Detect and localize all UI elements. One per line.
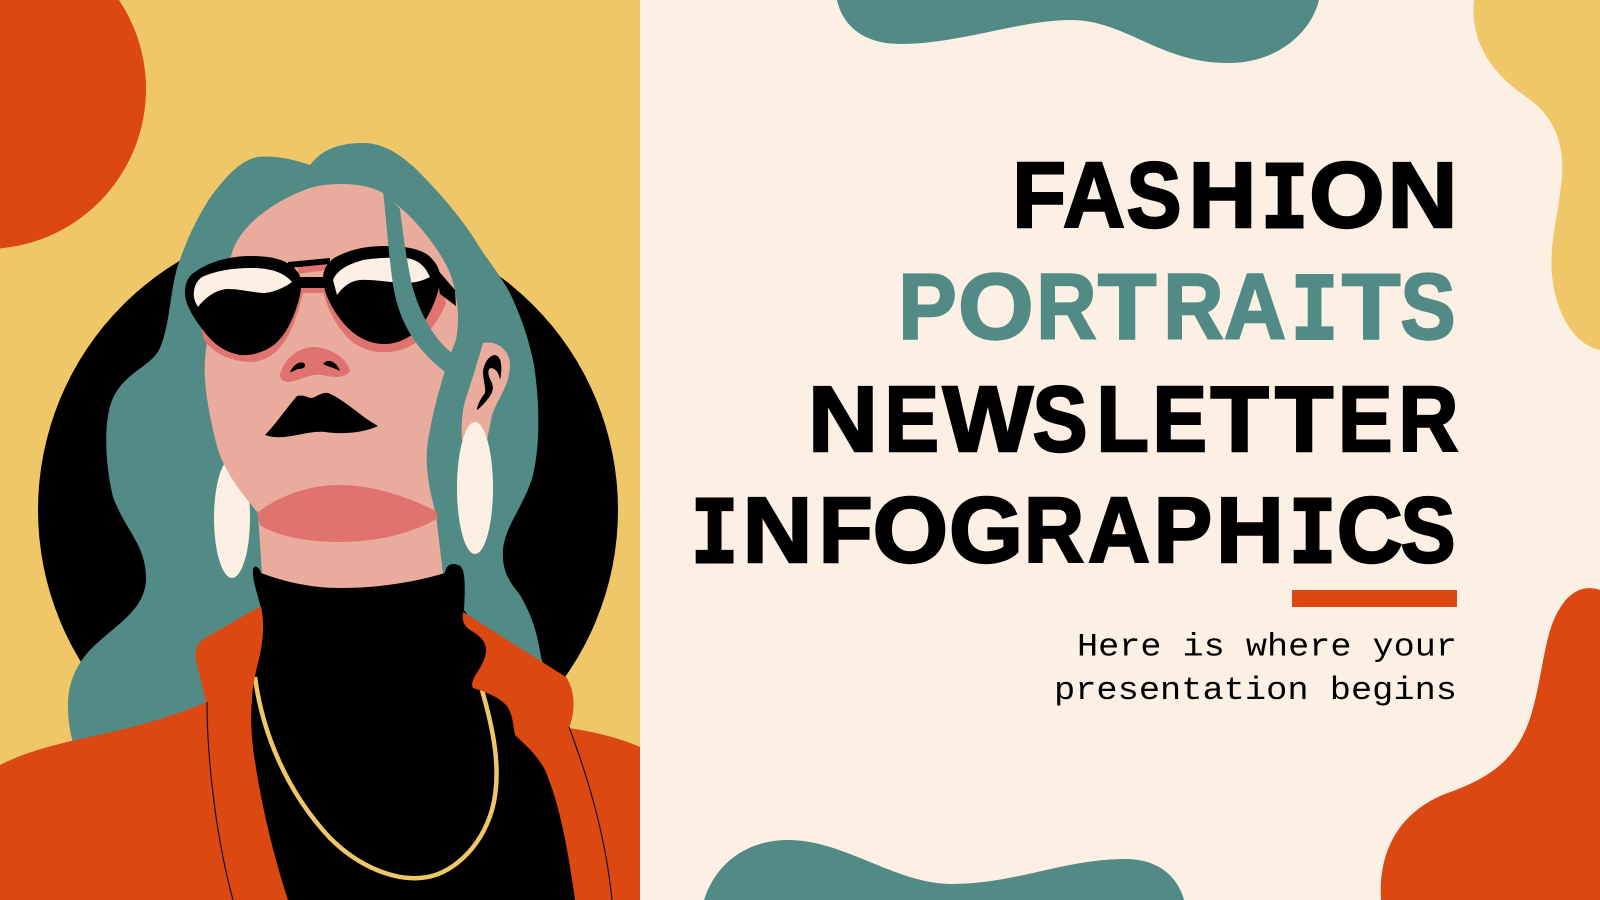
black circle xyxy=(38,220,618,800)
title line: PORTRAITS: O xyxy=(958,254,1034,358)
coat seam right xyxy=(569,727,612,900)
blob: bottom right orange xyxy=(1381,588,1600,900)
title line: NEWSLETTER: N xyxy=(808,367,878,471)
bridge xyxy=(288,258,330,288)
bridge skin pink strip xyxy=(298,264,326,293)
right lens glare xyxy=(333,258,430,295)
blob: bottom teal xyxy=(704,840,1184,900)
right lens xyxy=(323,246,440,344)
title line: PORTRAITS: I xyxy=(1291,258,1338,367)
right glasses rim xyxy=(322,280,446,352)
temple xyxy=(436,268,456,306)
coat left xyxy=(0,606,288,900)
title line: INFOGRAPHICS: C xyxy=(1337,478,1403,582)
title line: NEWSLETTER: S xyxy=(1032,367,1088,471)
title line: NEWSLETTER: W xyxy=(943,367,1033,471)
left earring xyxy=(214,458,250,578)
orange circle xyxy=(0,0,146,249)
title xyxy=(691,143,1458,591)
title line: NEWSLETTER: R xyxy=(1398,367,1458,471)
coat right xyxy=(463,612,640,900)
title line: FASHION: I xyxy=(1261,147,1308,256)
title line: INFOGRAPHICS: O xyxy=(873,478,948,582)
blob: top right yellow xyxy=(1473,0,1600,350)
title line: INFOGRAPHICS: P xyxy=(1154,478,1212,582)
nose xyxy=(280,347,350,382)
ear detail xyxy=(477,355,501,410)
title line: PORTRAITS: S xyxy=(1400,254,1456,358)
title line: PORTRAITS: T xyxy=(1342,254,1400,358)
right earring xyxy=(457,422,493,554)
title line: INFOGRAPHICS: I xyxy=(1289,482,1336,591)
lips xyxy=(265,393,378,437)
turtleneck and body xyxy=(230,564,600,900)
title line: INFOGRAPHICS: G xyxy=(949,478,1023,582)
title line: INFOGRAPHICS: F xyxy=(819,478,873,582)
title line: NEWSLETTER: E xyxy=(1152,367,1207,471)
title line: FASHION: F xyxy=(1012,143,1066,247)
title line: INFOGRAPHICS: R xyxy=(1024,478,1084,582)
accent bar xyxy=(1292,590,1457,607)
title line: FASHION: N xyxy=(1388,143,1458,247)
title line: INFOGRAPHICS: H xyxy=(1216,478,1284,582)
title line: INFOGRAPHICS: A xyxy=(1088,478,1150,582)
title line: NEWSLETTER: E xyxy=(1338,367,1392,471)
left glasses rim xyxy=(200,285,304,362)
title line: FASHION: S xyxy=(1126,143,1182,247)
subtitle xyxy=(1054,628,1457,709)
title line: FASHION: H xyxy=(1188,143,1256,247)
panel: portrait illustration xyxy=(0,0,640,900)
right nostril xyxy=(323,361,340,371)
title line: PORTRAITS: R xyxy=(1036,254,1096,358)
title line: FASHION: O xyxy=(1309,143,1385,247)
title line: PORTRAITS: A xyxy=(1224,254,1286,358)
title line: NEWSLETTER: L xyxy=(1096,367,1149,471)
title line: NEWSLETTER: T xyxy=(1275,367,1333,471)
face and neck xyxy=(205,184,458,590)
title line: PORTRAITS: T xyxy=(1098,254,1156,358)
subtitle line 2: presentation begins xyxy=(1054,672,1457,709)
title line: FASHION: A xyxy=(1063,143,1125,247)
title line: INFOGRAPHICS: N xyxy=(742,478,812,582)
left lens xyxy=(185,256,301,355)
title line: INFOGRAPHICS: I xyxy=(691,482,738,591)
neck shadow xyxy=(257,485,438,542)
coat seam left xyxy=(207,702,233,900)
title line: NEWSLETTER: E xyxy=(884,367,939,471)
title line: NEWSLETTER: T xyxy=(1210,367,1269,471)
subtitle line 1: Here is where your xyxy=(1077,628,1457,666)
title line: INFOGRAPHICS: S xyxy=(1400,478,1456,582)
title line: PORTRAITS: R xyxy=(1163,254,1224,358)
front hair strand xyxy=(383,191,452,372)
left lens glare xyxy=(194,268,292,307)
blob: top teal xyxy=(837,0,1319,63)
necklace xyxy=(255,677,497,878)
title line: PORTRAITS: P xyxy=(898,254,957,358)
hair xyxy=(68,143,560,745)
left nostril xyxy=(290,363,305,372)
sunglasses xyxy=(185,246,456,355)
yellow panel background xyxy=(0,0,640,900)
earlobe and ear xyxy=(462,342,510,440)
